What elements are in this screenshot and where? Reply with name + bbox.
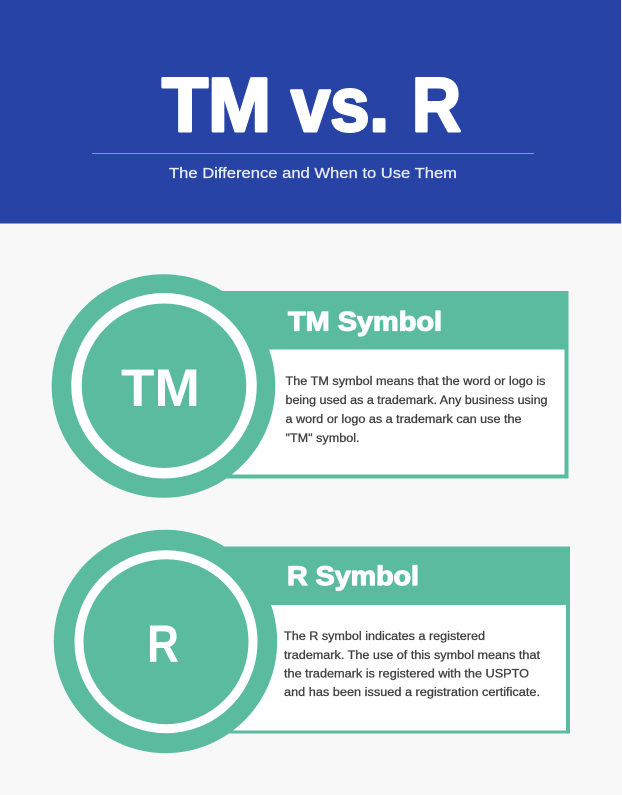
panel: TM symbol [52,274,568,498]
card: TM [200,291,568,478]
panel: R symbol [54,530,570,753]
card: R [200,546,570,734]
panel: header [0,0,621,224]
icon: TM circle badge [52,274,275,498]
icon: R circle badge: R [147,615,179,674]
heading: R Symbol: R Symbol [287,561,419,591]
text block: TM description: being used as a trademark. Any business using [286,393,548,407]
text block: R description: and has been issued a registration certificate. [284,685,540,699]
text block: R description: trademark. The use of this symbol means that [284,648,541,662]
text block: TM description: The TM symbol means that the word or logo is [286,374,546,388]
title [162,63,461,148]
icon: TM circle badge: TM [121,359,200,418]
title: R [412,63,461,148]
text block: TM description: a word or logo as a trademark can use the [286,412,522,426]
subtitle: The Difference and When to Use Them [169,165,457,182]
title: vs. [291,63,389,148]
text block: TM description: "TM" symbol. [286,431,360,445]
heading: TM Symbol: TM Symbol [288,306,442,336]
text block: TM description [286,374,548,445]
text block: R description [284,629,541,699]
text block: R description: The R symbol indicates a registered [284,629,485,643]
icon: R circle badge [54,530,277,753]
title: TM [162,63,271,148]
text block: R description: the trademark is registered with the USPTO [284,666,529,680]
